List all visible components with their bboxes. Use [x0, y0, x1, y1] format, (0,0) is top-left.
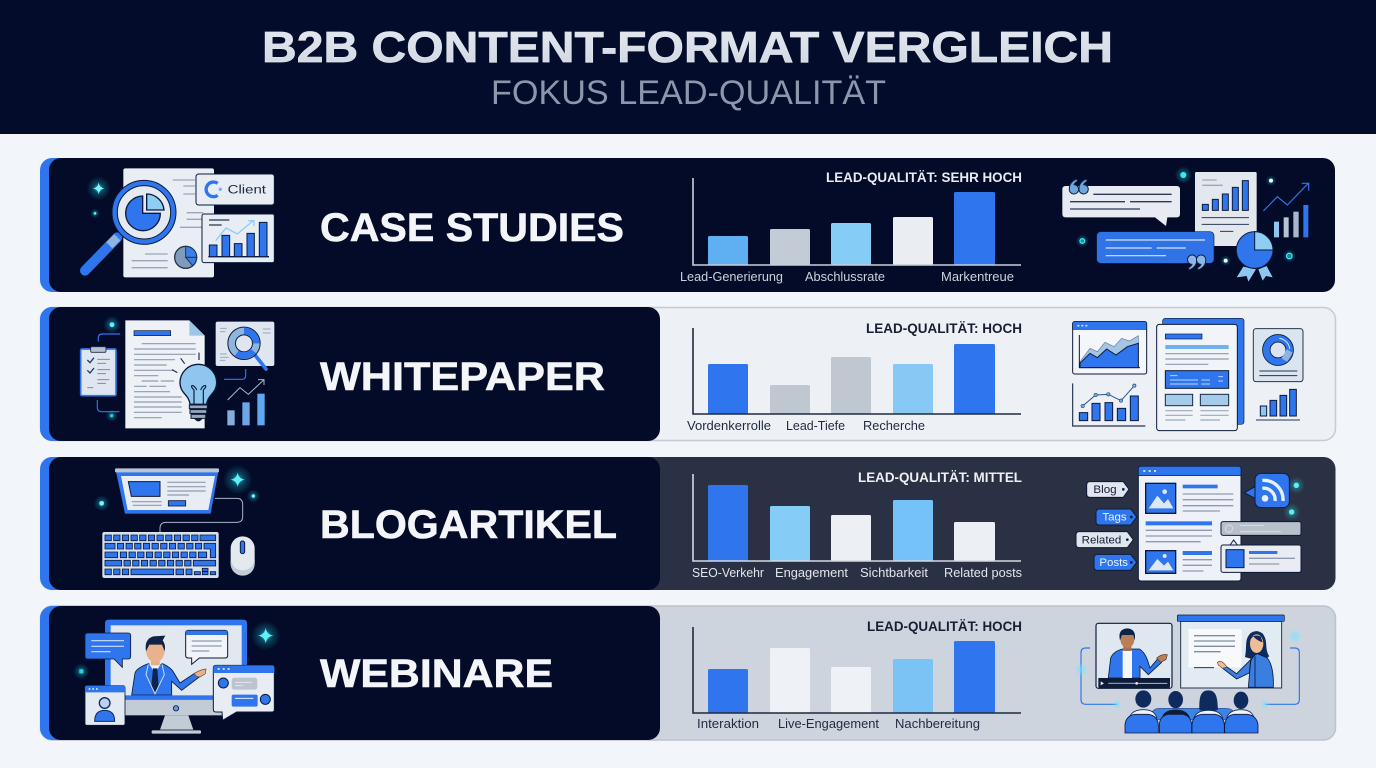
bar chart: webinare: Nachbereitung: [895, 717, 980, 731]
panel: whitepaper: [40, 307, 1336, 441]
panel: webinare: [40, 606, 1336, 740]
tag: tags: Tags: [1102, 512, 1127, 524]
subtitle: FOKUS LEAD-QUALITÄT: [491, 74, 886, 112]
header band: [0, 0, 1376, 134]
bar chart: blogartikel: SEO-Verkehr: [692, 566, 764, 580]
tag: posts: [1094, 554, 1137, 570]
heading: BLOGARTIKEL: [320, 503, 617, 547]
bar chart: case studies: [680, 170, 1022, 284]
bar chart: whitepaper: LEAD-QUALITÄT: HOCH: [866, 321, 1022, 336]
heading: CASE STUDIES: [320, 206, 624, 250]
title: B2B CONTENT-FORMAT VERGLEICH: [262, 23, 1113, 72]
bar chart: blogartikel: Related posts: [944, 566, 1022, 580]
icon: computer with keyboard and mouse: [94, 465, 260, 578]
bar chart: webinare: [693, 619, 1022, 731]
heading: WEBINARE: [320, 652, 553, 696]
tag: posts: Posts: [1099, 557, 1128, 569]
bar chart: blogartikel: LEAD-QUALITÄT: MITTEL: [858, 470, 1022, 485]
icon: magnifier over case study document: [85, 168, 274, 277]
tag: blog: Blog: [1093, 484, 1117, 496]
tag: blog: [1087, 482, 1129, 497]
bar chart: case studies: Abschlussrate: [805, 270, 885, 284]
heading: WHITEPAPER: [320, 355, 605, 399]
bar chart: webinare: Interaktion: [697, 717, 759, 731]
bar chart: whitepaper: Lead-Tiefe: [786, 419, 845, 433]
bar chart: whitepaper: Vordenkerrolle: [687, 419, 771, 433]
bar chart: case studies: Lead-Generierung: [680, 270, 783, 284]
icon: blog page with tags and rss: [1076, 466, 1305, 581]
bar chart: webinare: LEAD-QUALITÄT: HOCH: [867, 619, 1022, 634]
tag: related: Related: [1082, 534, 1121, 546]
bar chart: case studies: LEAD-QUALITÄT: SEHR HOCH: [826, 170, 1022, 185]
client label: Client: [228, 183, 267, 197]
bar chart: webinare: Live-Engagement: [778, 717, 880, 731]
bar chart: whitepaper: [687, 321, 1022, 433]
icon: whitepaper with light bulb: [81, 316, 274, 428]
bar chart: blogartikel: Engagement: [775, 566, 849, 580]
bar chart: whitepaper: Recherche: [863, 419, 925, 433]
panel: case studies: [40, 158, 1335, 292]
bar chart: blogartikel: Sichtbarkeit: [860, 566, 929, 580]
panel: blogartikel: [40, 457, 1336, 590]
icon: testimonials and award: [1062, 166, 1309, 282]
icon: webinar audience and presenters: [1074, 615, 1302, 733]
tag: related: [1076, 532, 1133, 548]
bar chart: case studies: Markentreue: [941, 270, 1014, 284]
icon: report and charts: [1073, 318, 1303, 431]
bar chart: blogartikel: [692, 470, 1022, 580]
tag: tags: [1096, 509, 1137, 525]
icon: webinar presenter on monitor: [73, 620, 280, 734]
